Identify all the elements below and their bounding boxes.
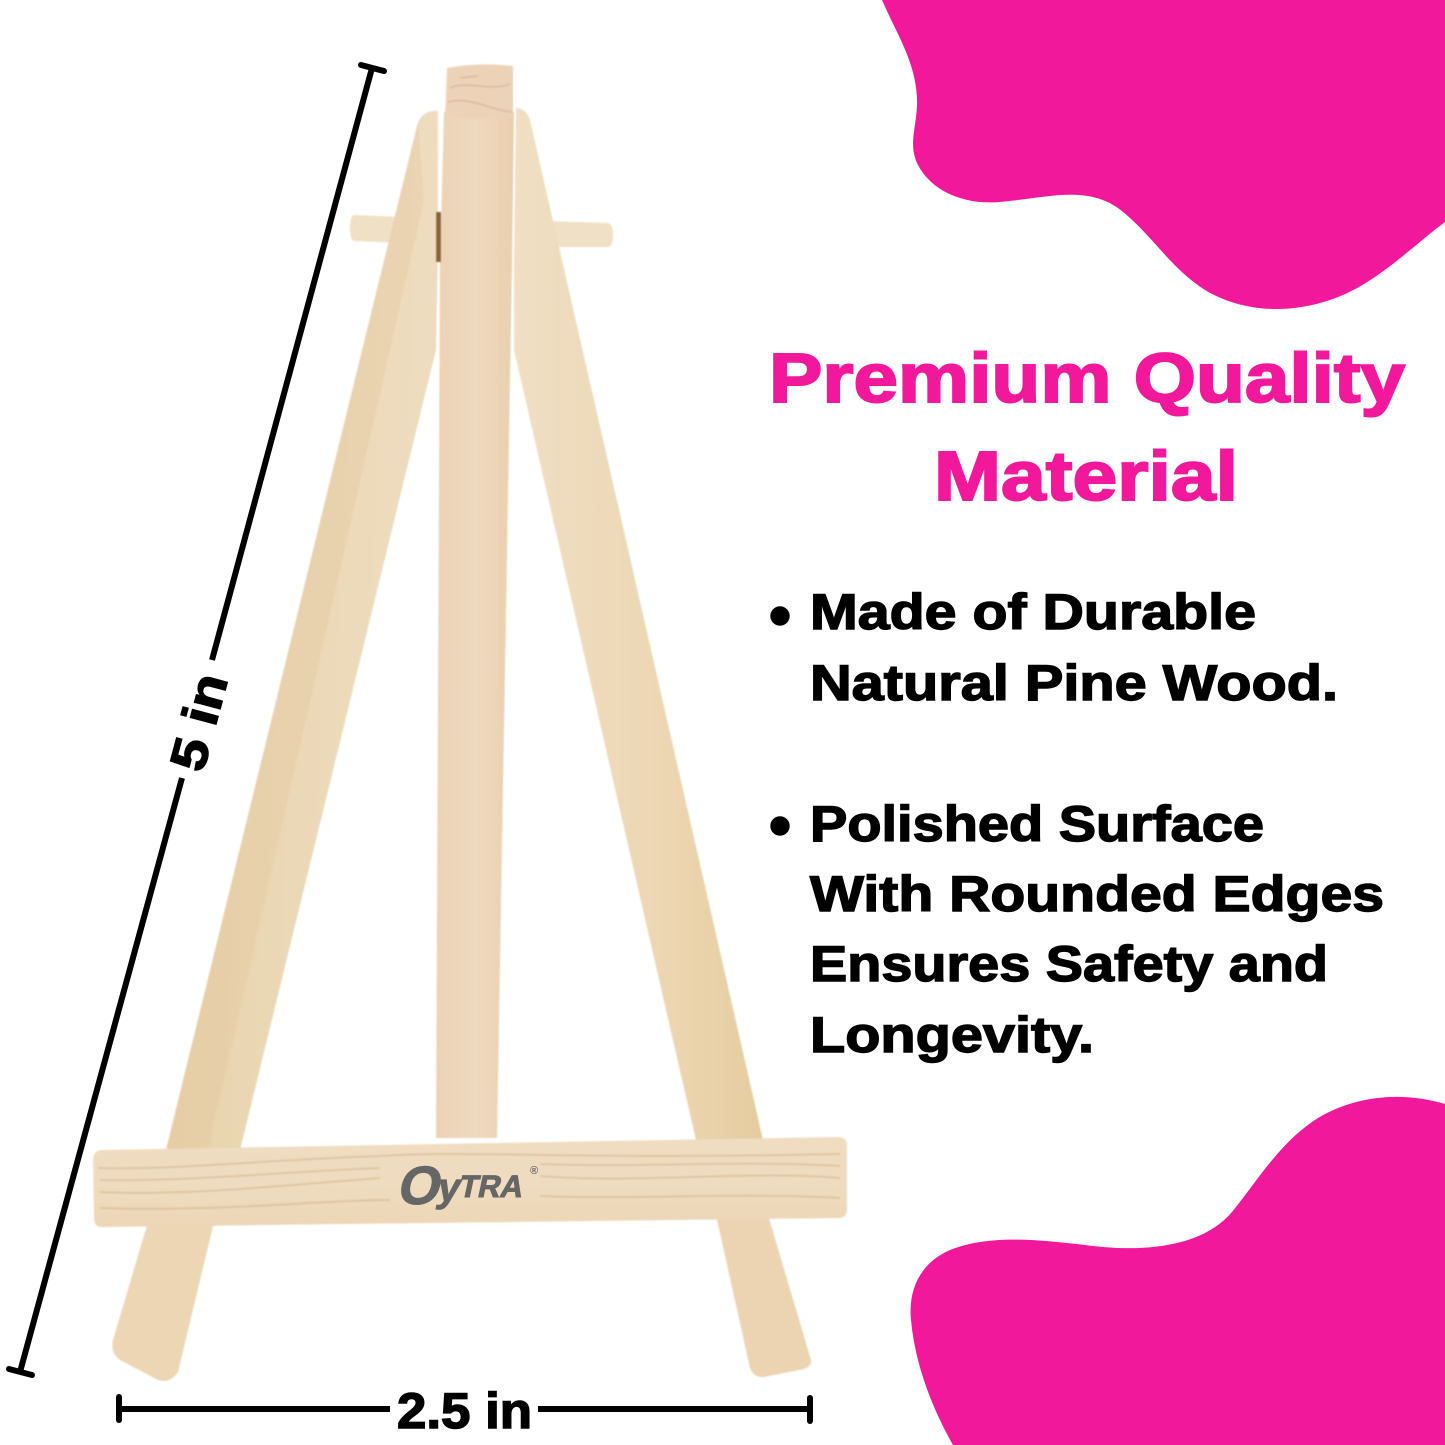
- end grain speckle: [448, 76, 512, 112]
- bullet 1: [771, 584, 1338, 711]
- brand logo: Oytra: [393, 1156, 538, 1216]
- center post: [436, 112, 514, 1138]
- bullet list: [771, 584, 1384, 1063]
- logo wordmark: O: [393, 1156, 448, 1216]
- left leg shaded edge: [166, 122, 424, 1150]
- bullet dot 2: [771, 817, 789, 835]
- height line upper: [212, 68, 372, 660]
- width line left: [118, 1406, 390, 1412]
- bullet 2 line 3: Ensures Safety and: [810, 936, 1328, 992]
- height bottom cap: [9, 1369, 32, 1375]
- hinge gap: [436, 212, 441, 262]
- dimension: height 5 in: [9, 65, 384, 1375]
- height label: 5 in: [159, 667, 239, 777]
- crossbar wood grain: [98, 1154, 840, 1209]
- title line 2: Material: [934, 437, 1238, 515]
- registered mark: ®: [530, 1165, 538, 1177]
- bullet 2: [771, 796, 1384, 1063]
- height top cap: [361, 65, 384, 71]
- bullet 2 line 4: Longevity.: [810, 1007, 1094, 1063]
- height line lower: [20, 778, 182, 1372]
- left peg: [350, 215, 402, 243]
- right peg: [548, 221, 613, 247]
- right leg upper: [514, 108, 763, 1140]
- bullet 2 line 2: With Rounded Edges: [810, 866, 1384, 922]
- left leg lower: [112, 1222, 214, 1381]
- easel illustration: [93, 64, 847, 1381]
- width line right: [538, 1406, 811, 1412]
- left leg upper: [166, 111, 438, 1150]
- title: [769, 339, 1405, 515]
- logo wordmark: y: [434, 1164, 466, 1210]
- right leg lower: [716, 1215, 811, 1377]
- logo wordmark: TRA: [456, 1169, 527, 1204]
- bullet 1 line 2: Natural Pine Wood.: [810, 655, 1338, 711]
- decorative blob: bottom right: [911, 1097, 1445, 1445]
- width label: 2.5 in: [397, 1383, 532, 1439]
- width right cap: [807, 1398, 813, 1421]
- bullet 2 line 1: Polished Surface: [810, 796, 1264, 852]
- decorative blob: top right: [882, 0, 1445, 309]
- width left cap: [116, 1397, 122, 1420]
- crossbar: [93, 1137, 847, 1227]
- center post top end grain: [445, 64, 513, 118]
- title line 1: Premium Quality: [769, 339, 1405, 417]
- bullet dot 1: [771, 607, 789, 625]
- bullet 1 line 1: Made of Durable: [810, 584, 1256, 640]
